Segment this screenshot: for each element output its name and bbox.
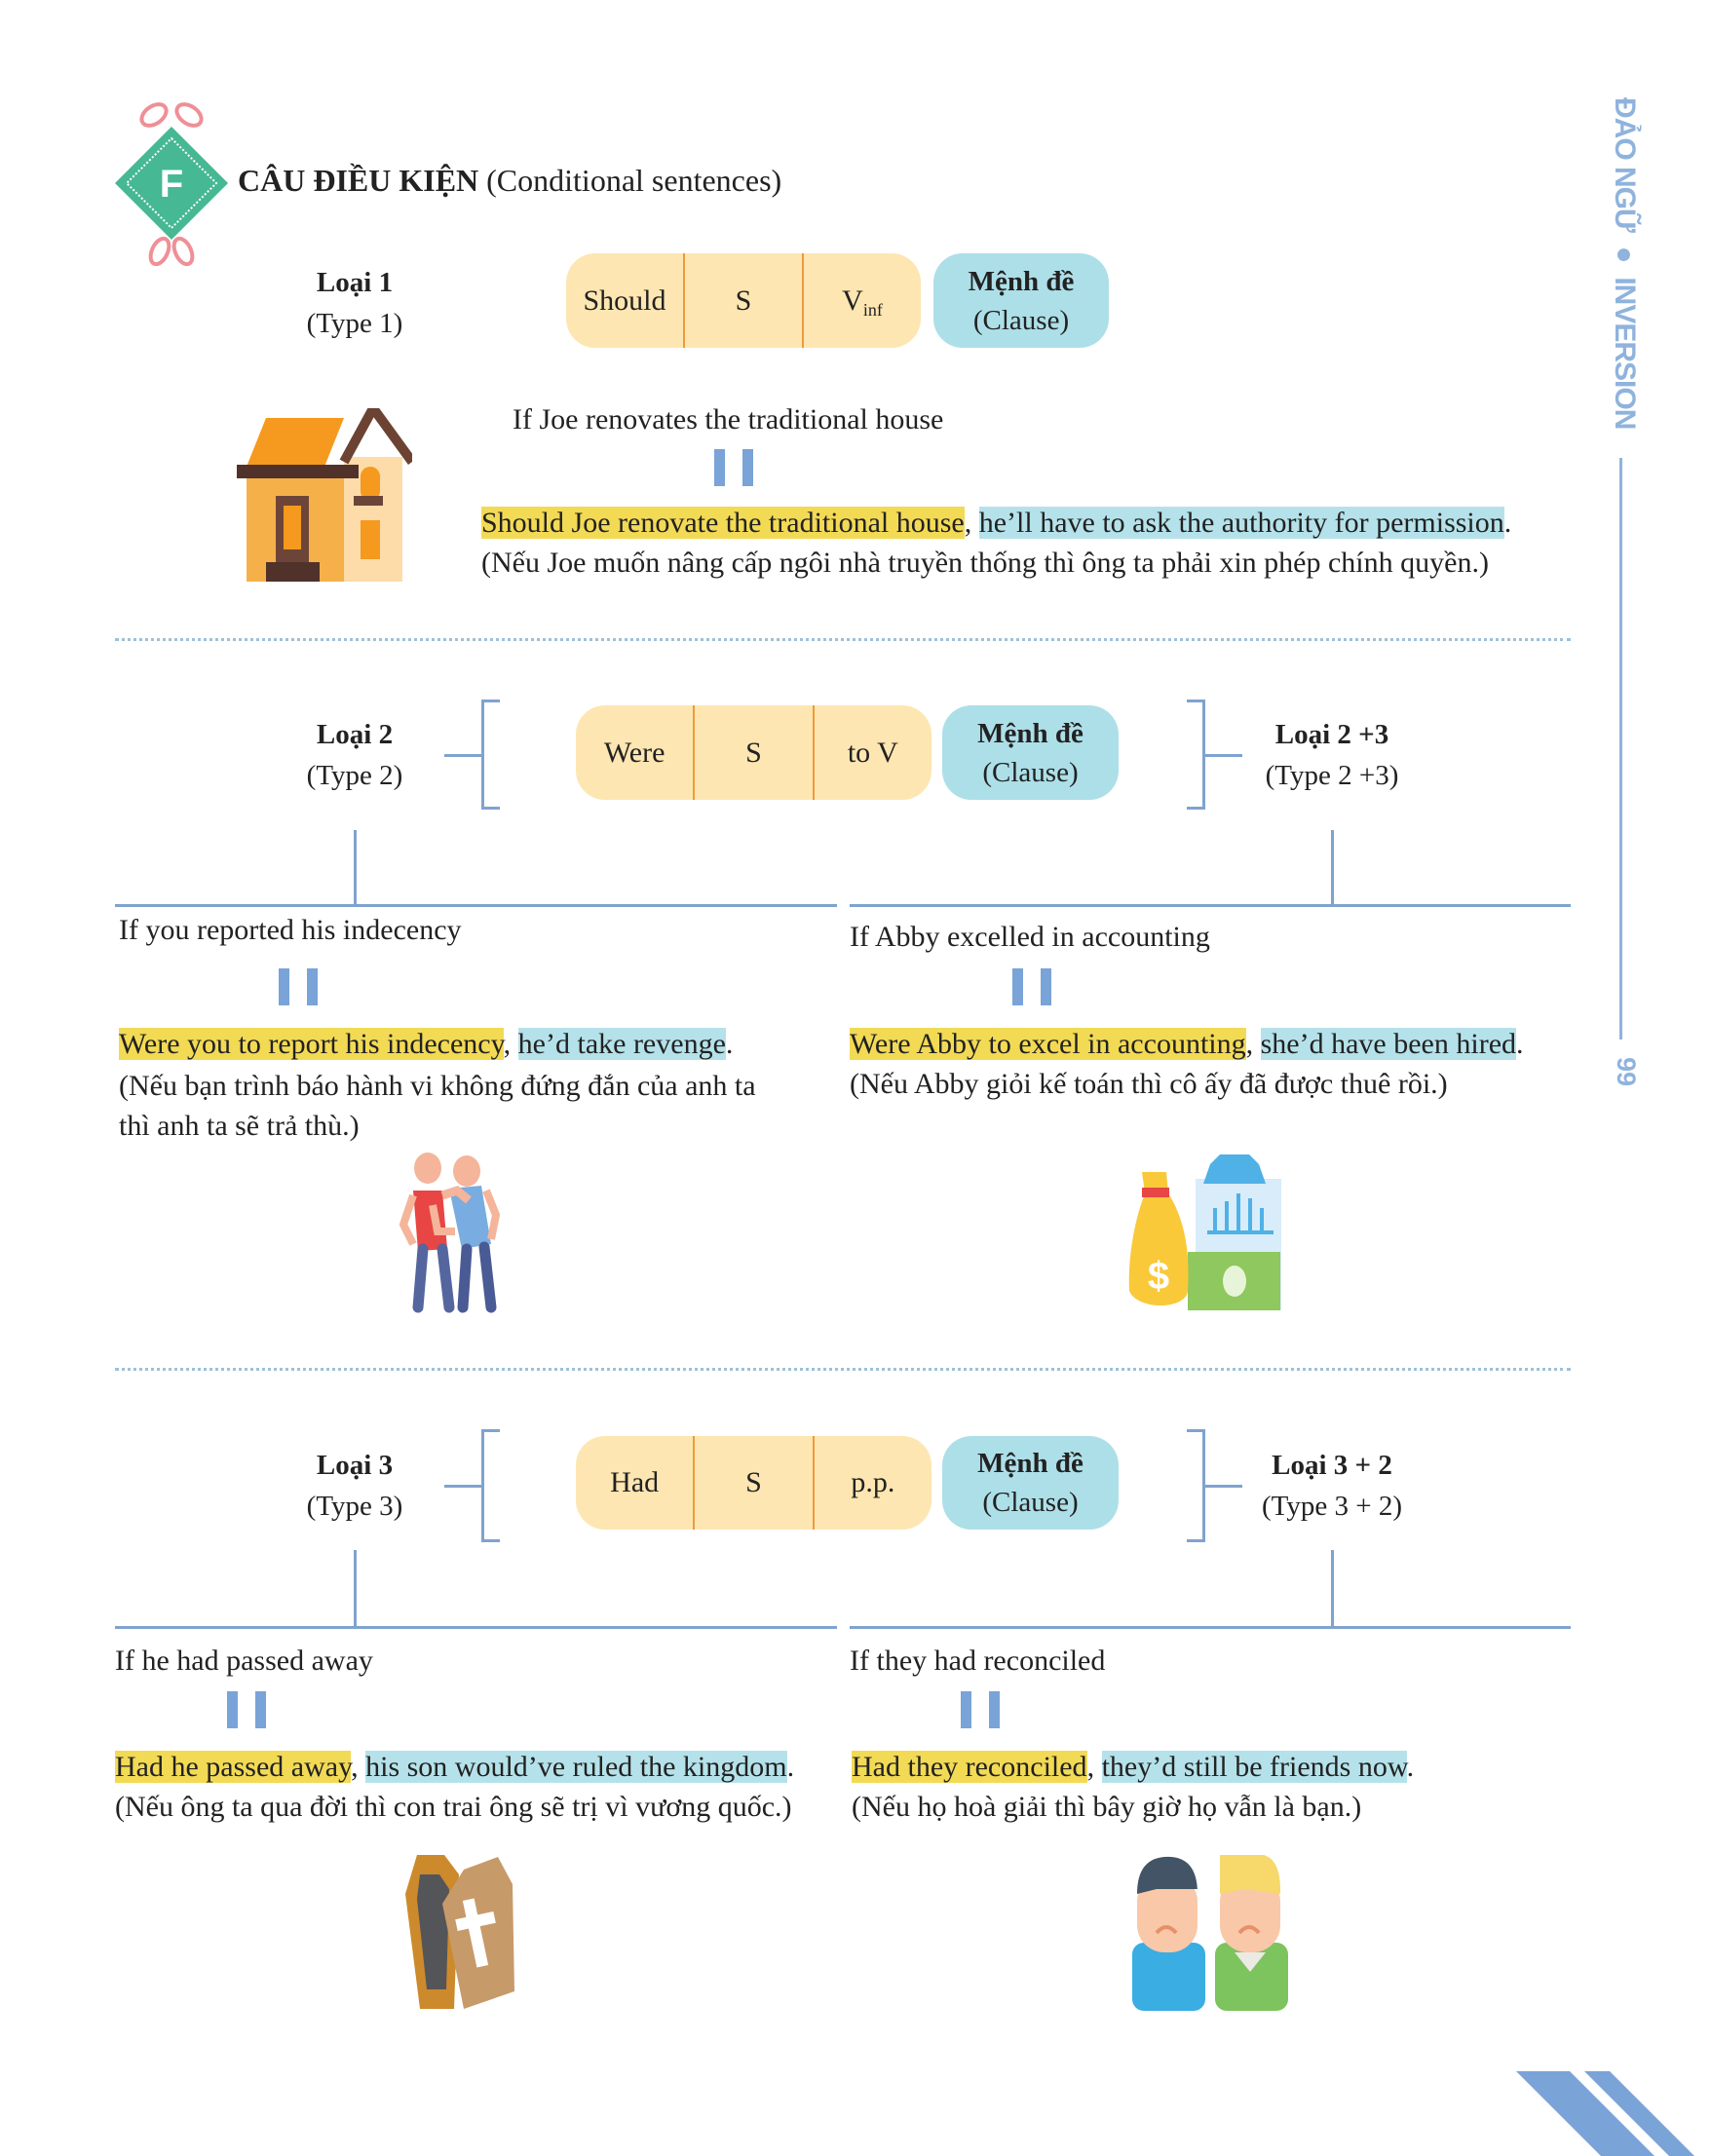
label: Loai 3+2: (Type 3 + 2)	[1262, 1491, 1402, 1522]
section: type 3	[115, 1429, 1571, 2011]
formula pill: Were S to V: Were	[604, 737, 665, 768]
label: Loai 2: Loại 2	[317, 719, 393, 750]
side tab: chapter label: ĐẢO NGỮ ● INVERSION	[1609, 97, 1641, 429]
clause pill: Mệnh đề	[969, 265, 1074, 296]
label: Loai 3: Loại 3	[317, 1450, 393, 1481]
clause pill	[942, 705, 1119, 800]
icon: money bag and chart: $	[1148, 1255, 1169, 1298]
formula pill: Should S Vinf: S	[736, 284, 751, 316]
label: Loai 3: (Type 3)	[307, 1491, 402, 1522]
formula pill: Should S Vinf	[566, 253, 921, 348]
label: Loai 1: Loại 1	[317, 267, 393, 298]
text: if clause: If Joe renovates the traditional house	[513, 403, 943, 435]
example left: If you reported his indecency	[119, 914, 462, 946]
text: inverted example: Should Joe renovate the traditional house, he’ll have to ask the authority for permission.	[481, 507, 1511, 539]
formula pill: Had S p.p.: Had	[610, 1466, 659, 1498]
label: Loai 3+2: Loại 3 + 2	[1272, 1450, 1392, 1481]
example right: Were Abby to excel in accounting, she’d have been hired.	[850, 1028, 1524, 1060]
formula pill: Had S p.p.: S	[745, 1466, 762, 1498]
example left	[119, 914, 756, 1142]
formula pill: Were S to V: to V	[848, 737, 898, 768]
example right	[850, 921, 1524, 1100]
icon: section F diamond badge	[115, 102, 228, 267]
icon: coffin	[405, 1855, 514, 2009]
clause pill: (Clause)	[973, 304, 1069, 335]
clause pill: Mệnh đề	[977, 717, 1084, 748]
clause pill: (Clause)	[982, 1487, 1079, 1518]
example right	[850, 1645, 1414, 1823]
icon: house	[237, 408, 412, 582]
label: Loai 2	[307, 719, 402, 791]
label: Loai 2+3	[1266, 719, 1398, 791]
label: Loai 2+3: (Type 2 +3)	[1266, 760, 1398, 791]
text: translation: (Nếu Joe muốn nâng cấp ngôi nhà truyền thống thì ông ta phải xin phép chính quyền.)	[481, 547, 1489, 579]
icon: two men fighting	[399, 1153, 501, 1313]
clause pill: Mệnh đề	[977, 1448, 1084, 1479]
section: type 2: (Nếu Abby giỏi kế toán thì cô ấy đã được thuê rồi.)	[850, 1068, 1448, 1100]
side tab: chapter label	[1609, 97, 1641, 1086]
clause pill	[933, 253, 1109, 348]
example left: Were you to report his indecency, he’d take revenge.	[119, 1028, 733, 1060]
formula pill: Were S to V	[576, 705, 932, 800]
label: Loai 3	[307, 1450, 402, 1522]
formula pill: Should S Vinf: Should	[583, 284, 666, 316]
icon: two sad men	[1132, 1855, 1288, 2011]
clause pill	[942, 1436, 1119, 1530]
formula pill: Should S Vinf: V	[842, 284, 863, 316]
formula pill: Should S Vinf: inf	[863, 300, 883, 320]
section: type 3: (Nếu ông ta qua đời thì con trai ông sẽ trị vì vương quốc.)	[115, 1791, 792, 1823]
formula pill: Were S to V: S	[745, 737, 762, 768]
example right: If Abby excelled in accounting	[850, 921, 1210, 953]
example left: (Nếu bạn trình báo hành vi không đứng đắn của anh ta	[119, 1070, 756, 1102]
icon: equals bars	[714, 449, 753, 486]
formula pill: Had S p.p.: p.p.	[851, 1466, 894, 1498]
example left: Had he passed away, his son would’ve ruled the kingdom.	[115, 1751, 794, 1783]
side tab: chapter label: 99	[1612, 1057, 1641, 1086]
example right: If they had reconciled	[850, 1645, 1105, 1677]
example left	[115, 1645, 794, 1823]
label: Loai 3+2	[1262, 1450, 1402, 1522]
example left: If he had passed away	[115, 1645, 373, 1677]
icon: section F diamond badge: F	[160, 163, 183, 206]
label: Loai 2: (Type 2)	[307, 760, 402, 791]
section: type 1	[237, 253, 1511, 582]
label: Loai 2+3: Loại 2 +3	[1275, 719, 1388, 750]
decoration: corner stripes	[1516, 2071, 1694, 2156]
formula pill: Had S p.p.	[576, 1436, 932, 1530]
example right: Had they reconciled, they’d still be friends now.	[852, 1751, 1414, 1783]
label: Loai 1: (Type 1)	[307, 308, 402, 339]
icon: money bag and chart	[1128, 1154, 1281, 1310]
title: CÂU ĐIỀU KIỆN (Conditional sentences)	[238, 163, 781, 198]
label: Loai 1	[307, 267, 402, 339]
section: type 2: thì anh ta sẽ trả thù.)	[119, 1110, 360, 1142]
section: type 3: (Nếu họ hoà giải thì bây giờ họ vẫn là bạn.)	[852, 1791, 1361, 1823]
section: type 2	[115, 700, 1571, 1313]
clause pill: (Clause)	[982, 756, 1079, 787]
